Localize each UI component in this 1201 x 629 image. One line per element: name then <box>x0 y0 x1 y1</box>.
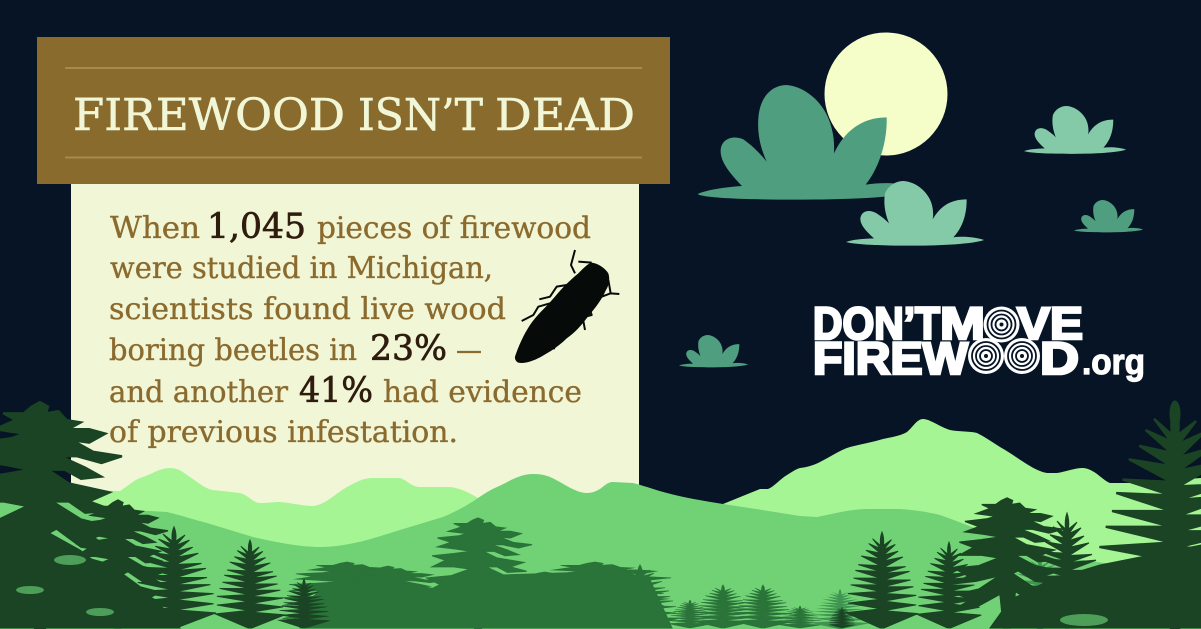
body text: and another <box>109 375 289 410</box>
tree: small back spruce b <box>693 585 753 628</box>
moon <box>824 32 948 156</box>
tree: back pine <box>427 518 532 629</box>
text panel <box>71 184 639 514</box>
forest floor: back <box>300 572 672 628</box>
logo: Don't Move Firewood.org <box>813 298 1145 384</box>
logo: Don't Move Firewood.org: FIREW <box>813 333 969 384</box>
body text: When <box>110 211 200 246</box>
logo: Don't Move Firewood.org: .org <box>1082 341 1145 382</box>
clouds <box>679 85 1143 367</box>
forest floor: left <box>0 525 180 628</box>
body text: had evidence <box>383 375 582 410</box>
tree: small back spruce a <box>667 600 713 628</box>
landscape: mid green hills <box>0 474 1201 629</box>
tree: small back spruce c <box>733 585 793 628</box>
tree: faint spruce centre right <box>810 589 870 629</box>
tree: spruce d <box>846 532 918 628</box>
logo: Don't Move Firewood.org: D <box>1040 333 1079 384</box>
body text: pieces of firewood <box>317 211 591 246</box>
body text: of previous infestation. <box>109 415 458 450</box>
tree: back pine cluster far left <box>282 562 415 628</box>
cloud: upper right light <box>1024 106 1126 154</box>
tree: spruce b <box>215 540 285 628</box>
body text: 1,045 <box>207 207 306 247</box>
logo: Don't Move Firewood.org: VE <box>1017 298 1083 349</box>
tree: second left pine <box>70 500 168 628</box>
icon: wood boring beetle <box>515 250 619 363</box>
title: FIREWOOD <box>73 90 345 141</box>
cloud: large dark <box>698 85 910 200</box>
tree: right pine <box>954 498 1063 628</box>
cloud: medium light <box>846 181 984 246</box>
title: ISN’T <box>358 90 483 141</box>
tree: back spruce <box>602 565 678 628</box>
tree: back pine beside <box>335 566 444 628</box>
tree: spruce e <box>917 542 981 628</box>
body text: 23% <box>370 329 447 369</box>
title <box>73 90 635 141</box>
logo: Don't Move Firewood.org: DON’T <box>813 298 940 349</box>
tree: small back spruce d <box>777 606 823 628</box>
body text: scientists found live wood <box>109 292 506 327</box>
body text: — <box>456 333 482 368</box>
title banner <box>37 37 670 184</box>
tree: back pine cluster <box>523 562 671 628</box>
ground highlights <box>16 555 1108 626</box>
landscape: light green hills <box>0 419 1201 629</box>
body text <box>109 207 591 450</box>
cloud: small left dark <box>679 335 748 367</box>
tree: tall left pine <box>0 402 122 628</box>
title: DEAD <box>495 90 635 141</box>
tree: spruce c <box>278 579 330 628</box>
back forest <box>282 518 823 629</box>
tree: small spruce <box>829 607 855 628</box>
tree: spruce a <box>132 527 216 628</box>
tree: faint spruce right <box>998 555 1082 629</box>
forest floor: right <box>990 545 1201 628</box>
foreground forest <box>0 401 1201 628</box>
icon: log rings <box>968 306 1040 374</box>
faint mid trees <box>810 555 1082 629</box>
logo: Don't Move Firewood.org: M <box>940 298 985 349</box>
body text: 41% <box>299 371 373 411</box>
tree: spruce f <box>1029 513 1105 628</box>
tree: tall right spruce <box>1095 403 1201 628</box>
body text: boring beetles in <box>109 333 357 368</box>
body text: were studied in Michigan, <box>110 251 493 286</box>
tree: right spruce tip <box>1170 401 1180 427</box>
tree: back pine cluster left <box>480 572 613 628</box>
cloud: small right dark <box>1074 200 1143 232</box>
